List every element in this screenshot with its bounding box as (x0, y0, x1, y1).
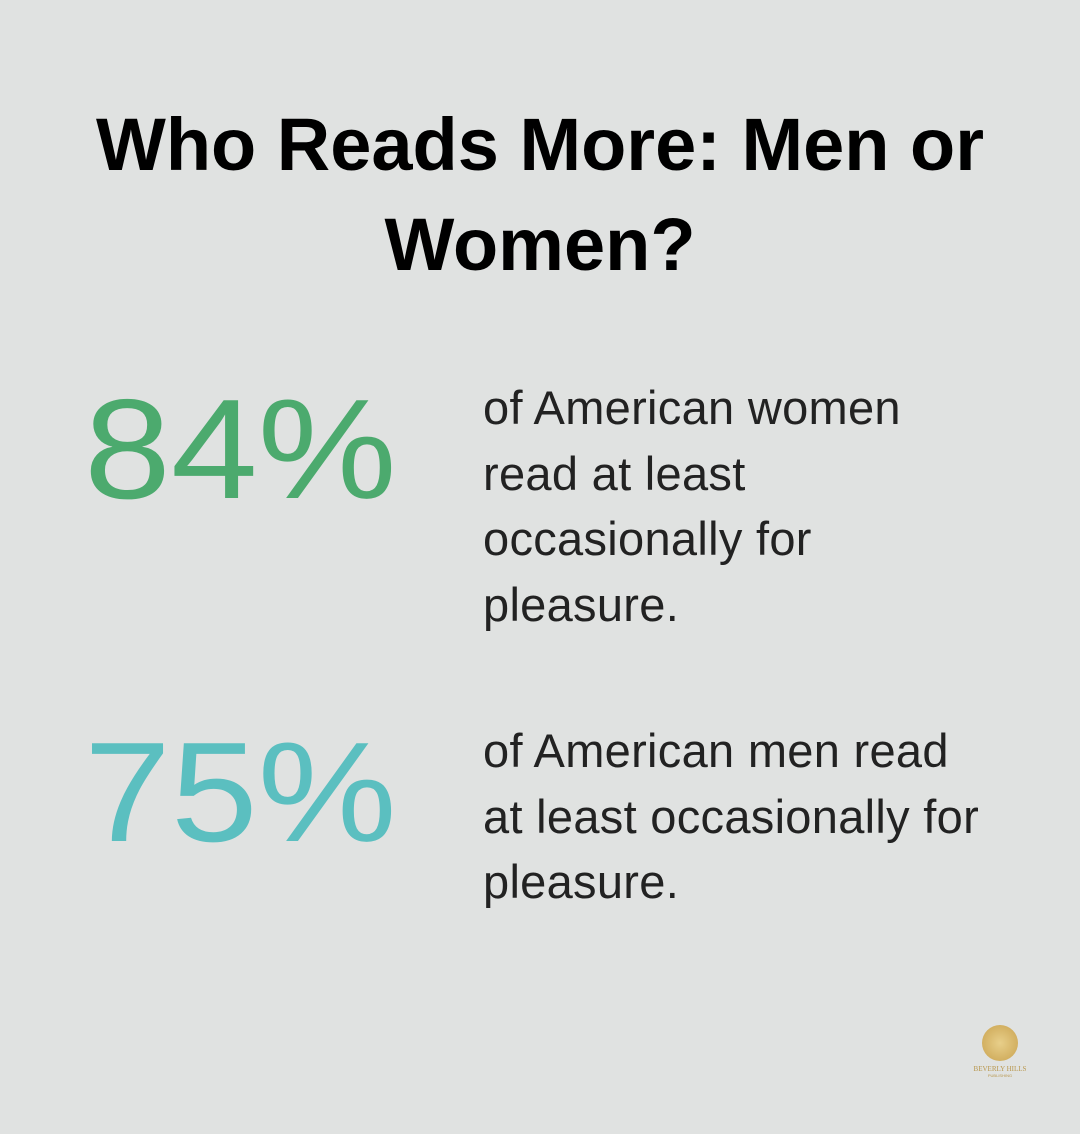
logo: BEVERLY HILLS (974, 1065, 1026, 1073)
text: women: read at least (483, 446, 746, 500)
logo: PUBLISHING (988, 1073, 1012, 1078)
logo (974, 1025, 1026, 1078)
text: men: at least occasionally for (483, 790, 979, 842)
text: men (483, 724, 979, 908)
stat: women: 84% (84, 370, 397, 529)
text: women: of American women (483, 381, 901, 434)
title: Women? (384, 203, 696, 286)
title: Who Reads More: Men or (96, 103, 984, 186)
text: men: of American men read (483, 724, 949, 777)
stat: men: 75% (84, 713, 397, 872)
title (96, 103, 984, 286)
text: women (483, 381, 901, 631)
text: women: pleasure. (483, 578, 679, 630)
text: men: pleasure. (483, 855, 679, 908)
text: women: occasionally for (483, 512, 812, 565)
